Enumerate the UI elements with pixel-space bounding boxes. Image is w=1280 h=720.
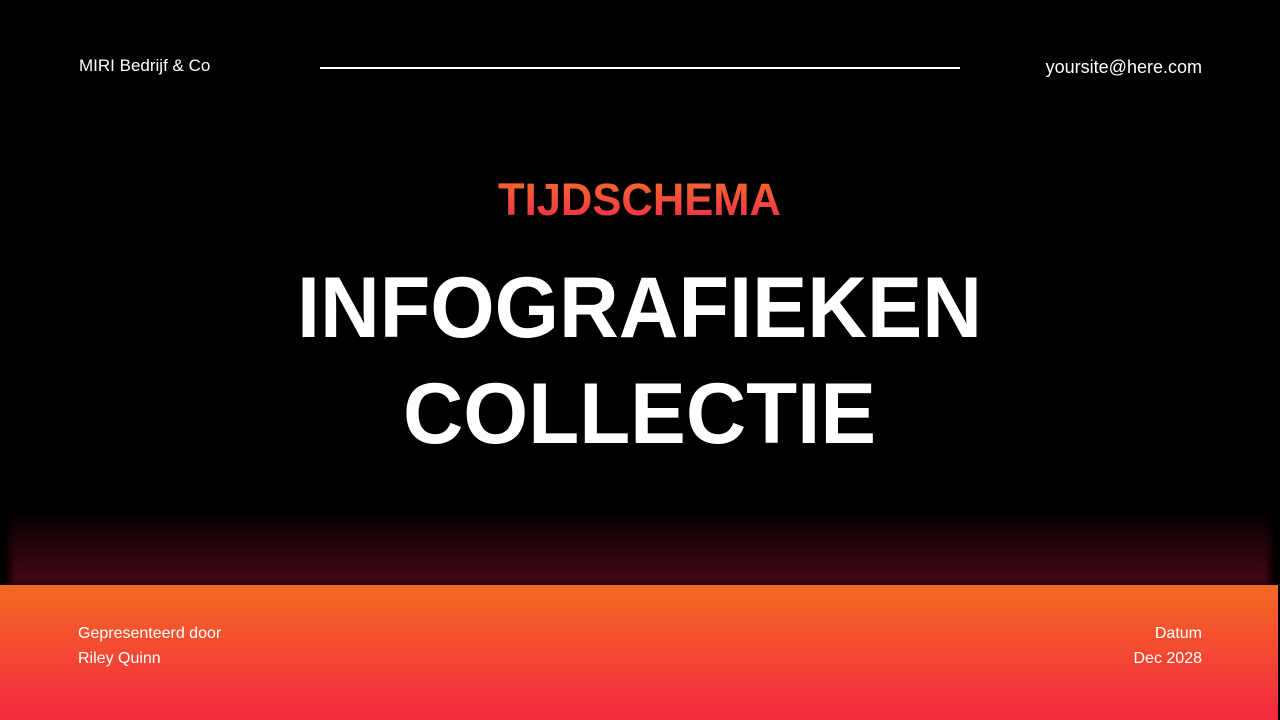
date xyxy=(1134,625,1202,667)
presenter xyxy=(78,625,221,667)
footer band xyxy=(0,585,1278,720)
presenter: Riley Quinn xyxy=(78,650,161,667)
date: Datum xyxy=(1155,625,1202,642)
date: Dec 2028 xyxy=(1134,650,1202,667)
company name: MIRI Bedrijf & Co xyxy=(79,56,210,75)
website: yoursite@here.com xyxy=(1046,57,1202,77)
main title xyxy=(297,260,982,462)
header line xyxy=(320,67,960,69)
main title: INFOGRAFIEKEN xyxy=(297,260,982,356)
bottom glow xyxy=(10,510,1270,585)
subtitle: TIJDSCHEMA: TIJDSCHEMA xyxy=(498,174,781,225)
presenter: Gepresenteerd door xyxy=(78,625,221,642)
main title: COLLECTIE xyxy=(403,366,876,462)
